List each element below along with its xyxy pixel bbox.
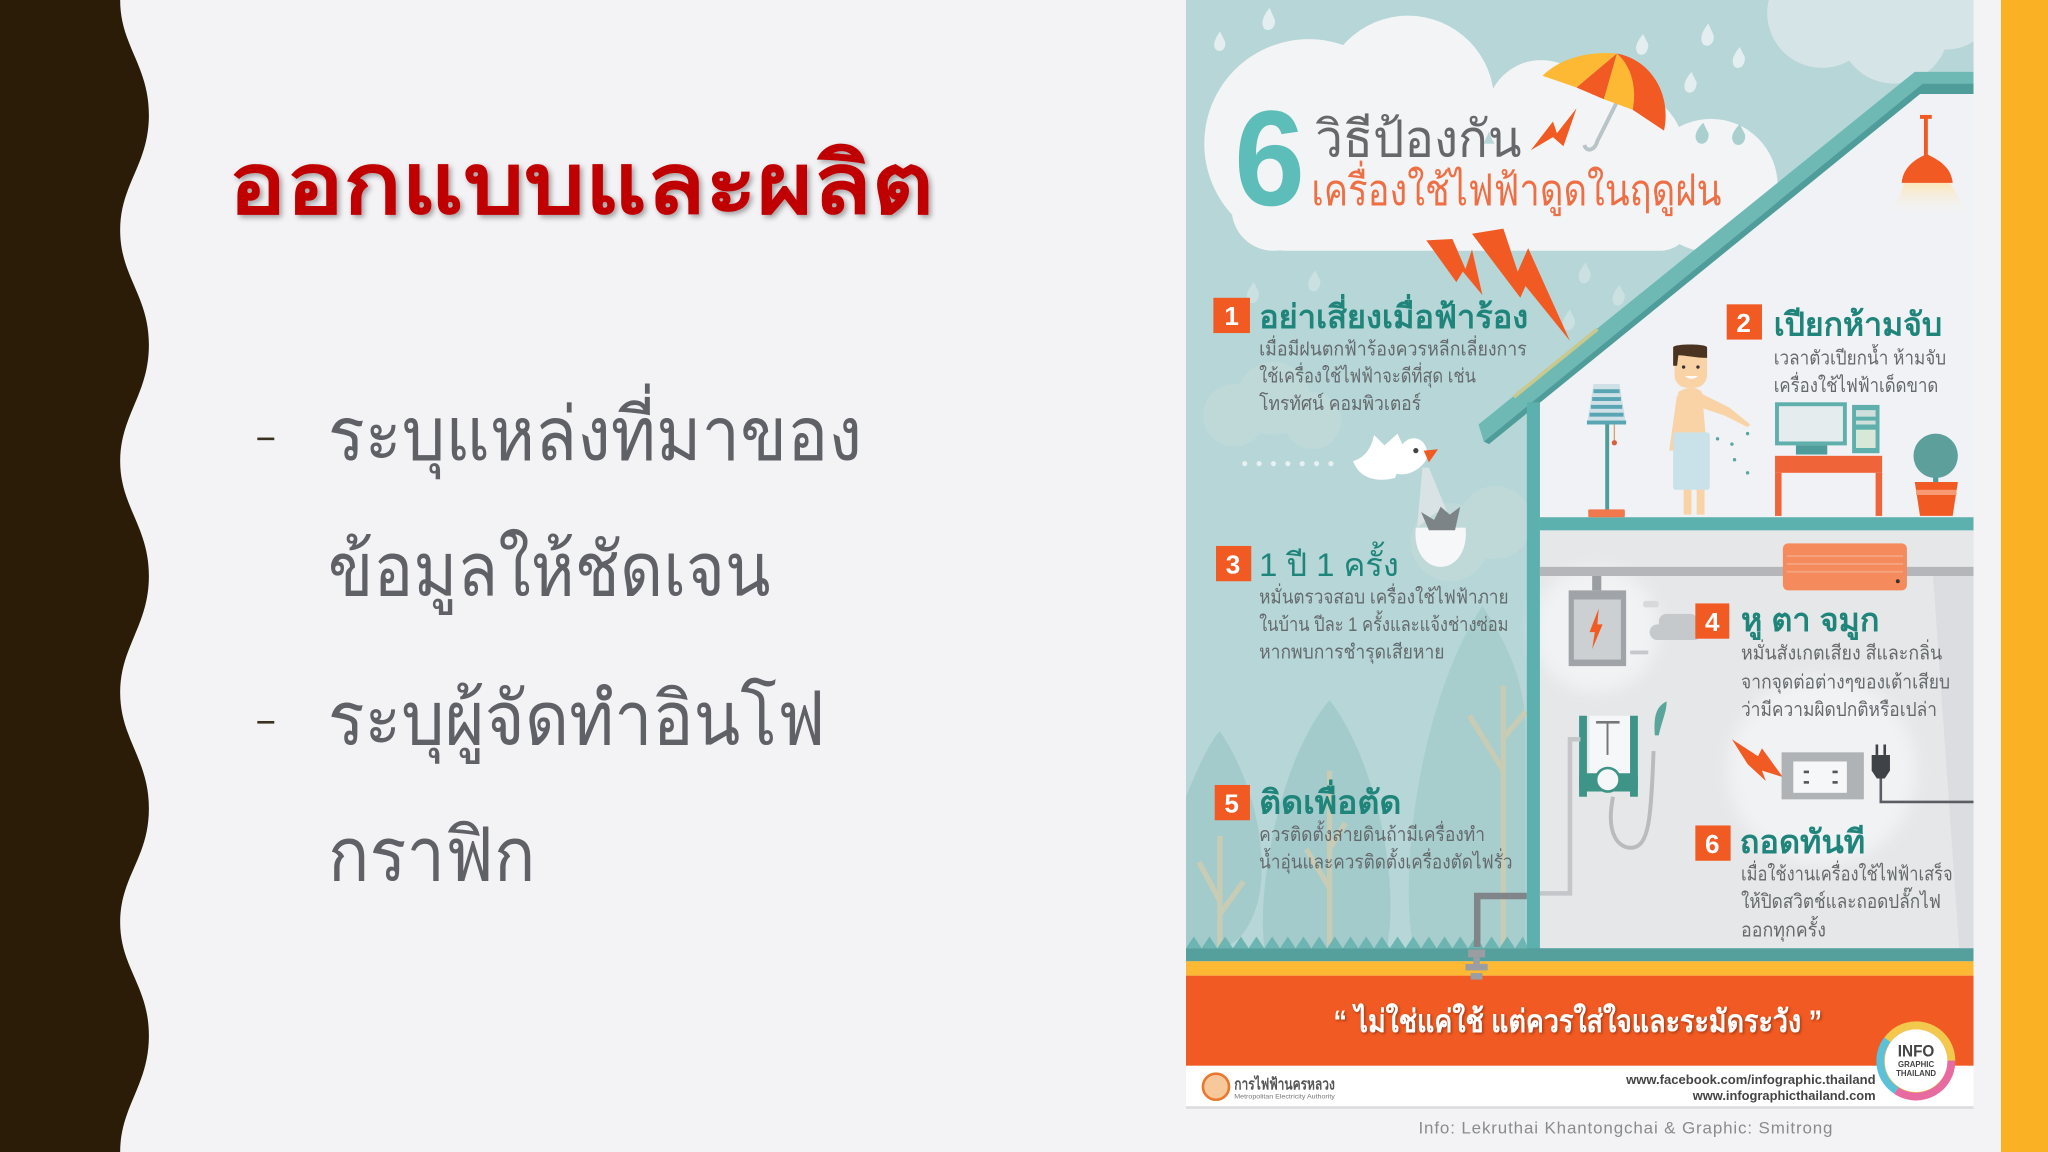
ceiling rail <box>1540 567 1974 576</box>
banner quote: “ ไม่ใช่แค่ใช้ แต่ควรใส่ใจและระมัดระวัง ” <box>1334 1003 1822 1039</box>
bundle <box>1415 528 1466 567</box>
ground rod <box>1465 950 1488 980</box>
icon: big lightning bolts <box>1426 229 1570 341</box>
icon: smoke <box>1630 601 1702 654</box>
bullet 2 line 1: ระบุผู้จัดทำอินโฟ <box>328 676 825 764</box>
title line 2: เครื่องใช้ไฟฟ้าดูดในฤดูฝน <box>1311 161 1721 217</box>
infographic poster <box>1186 0 1996 1109</box>
description: หากพบการชำรุดเสียหาย <box>1259 641 1445 664</box>
faint raindrops <box>1247 263 1625 330</box>
icon: ceiling lamp <box>1897 114 1962 204</box>
number badge <box>1727 304 1762 340</box>
icon: water heater <box>1579 701 1667 848</box>
footer logo: Metropolitan Electricity Authority <box>1203 1074 1336 1100</box>
roof <box>1479 72 1974 444</box>
step 1 <box>1213 294 1528 415</box>
tree trunks <box>1199 686 1526 947</box>
number badge <box>1695 825 1731 861</box>
Infographic Thailand badge: INFO <box>1898 1042 1934 1061</box>
house interior lower <box>1540 530 1974 948</box>
description: ใช้เครื่องใช้ไฟฟ้าจะดีที่สุด เช่น <box>1259 363 1476 389</box>
description: ออกทุกครั้ง <box>1741 915 1826 942</box>
footer web addresses <box>1625 1072 1876 1103</box>
icon: wet man <box>1669 344 1750 515</box>
icon: potted plant <box>1913 434 1958 516</box>
description: ควรติดตั้งสายดินถ้ามีเครื่องทำ <box>1259 820 1485 846</box>
footer logo: Metropolitan Electricity Authority: Metropolitan Electricity Authority <box>1234 1093 1336 1100</box>
lower room shadow <box>1933 576 1974 948</box>
bullet 2 dash <box>257 721 274 724</box>
tools in bundle <box>1421 507 1460 530</box>
yellow strip <box>1186 961 1974 976</box>
orange banner <box>1186 976 1974 1066</box>
description: โทรทัศน์ คอมพิวเตอร์ <box>1259 392 1421 415</box>
description <box>1774 343 1946 397</box>
heading: ติดเพื่อตัด <box>1259 780 1401 821</box>
title line 1: วิธีป้องกัน <box>1315 111 1522 168</box>
icon: stork carrying bundle <box>1242 434 1466 567</box>
icon: computer <box>1775 402 1880 455</box>
wing <box>1353 434 1405 480</box>
sling <box>1417 468 1448 528</box>
icon: electric meter <box>1569 576 1626 666</box>
icon: wall outlet with spark <box>1732 739 1974 802</box>
Infographic Thailand badge: THAILAND <box>1896 1069 1936 1078</box>
description <box>1741 860 1953 942</box>
step 3 <box>1216 541 1509 664</box>
house wall <box>1527 402 1540 951</box>
description: หมั่นตรวจสอบ เครื่องใช้ไฟฟ้าภาย <box>1259 583 1509 608</box>
description: จากจุดต่อต่างๆของเต้าเสียบ <box>1741 671 1950 694</box>
description: หมั่นสังเกตเสียง สีและกลิ่น <box>1741 640 1942 665</box>
description <box>1259 583 1509 664</box>
image credit: Info: Lekruthai Khantongchai & Graphic: Smitrong <box>1418 1119 1832 1138</box>
body <box>1396 438 1427 474</box>
bullet 1 line 2: ข้อมูลให้ชัดเจน <box>328 529 771 616</box>
number badge <box>1695 603 1729 639</box>
heading: เปียกห้ามจับ <box>1774 306 1942 343</box>
trees <box>1186 606 1526 947</box>
description: น้ำอุ่นและควรติดตั้งเครื่องตัดไฟรั่ว <box>1259 848 1512 875</box>
description <box>1259 820 1512 875</box>
white footer <box>1186 1066 1974 1106</box>
number badge <box>1215 785 1250 820</box>
step 2: 2 <box>1736 308 1751 338</box>
icon: umbrella <box>1543 53 1666 150</box>
step 2 <box>1727 304 1946 397</box>
faint clouds behind text <box>1203 362 1532 581</box>
heading: หู ตา จมูก <box>1741 601 1880 641</box>
title number 6: 6 <box>1234 82 1305 234</box>
icon: floor lamp <box>1587 384 1626 517</box>
number badge <box>1213 298 1250 333</box>
grass <box>1186 936 1528 948</box>
description: ในบ้าน ปีละ 1 ครั้งและแจ้งช่างซ่อม <box>1259 610 1509 636</box>
heading: ถอดทันที <box>1740 823 1865 860</box>
top right pale cloud <box>1767 0 1996 84</box>
step 6 <box>1695 823 1953 942</box>
step 5: 5 <box>1224 788 1239 818</box>
description: ว่ามีความผิดปกติหรือเปล่า <box>1741 699 1937 721</box>
step 3: 3 <box>1226 549 1240 579</box>
description <box>1259 335 1527 415</box>
step 1: 1 <box>1224 301 1239 331</box>
bullet 1 dash <box>257 438 274 440</box>
bullet list <box>257 383 862 896</box>
step 6: 6 <box>1705 829 1720 859</box>
description <box>1741 640 1950 721</box>
ground strip <box>1186 948 1974 961</box>
description: ให้ปิดสวิตช์และถอดปลั๊กไฟ <box>1741 887 1941 913</box>
bullet 1 line 1: ระบุแหล่งที่มาของ <box>328 383 862 480</box>
footer web addresses: www.infographicthailand.com <box>1692 1088 1876 1103</box>
heading: อย่าเสี่ยงเมื่อฟ้าร้อง <box>1259 294 1528 335</box>
Infographic Thailand badge <box>1880 1025 1951 1097</box>
footer logo: Metropolitan Electricity Authority: การไฟฟ้านครหลวง <box>1234 1074 1335 1093</box>
step 5 <box>1215 780 1512 875</box>
upper floor <box>1540 517 1974 530</box>
icon: air conditioner <box>1783 543 1907 590</box>
bullet 2 line 2: กราฟิก <box>328 813 536 896</box>
description: เมื่อใช้งานเครื่องใช้ไฟฟ้าเสร็จ <box>1741 860 1953 885</box>
raindrops on cloud <box>1696 123 1745 145</box>
step 4: 4 <box>1705 607 1720 637</box>
description: เวลาตัวเปียกน้ำ ห้ามจับ <box>1774 343 1946 369</box>
raindrops on sky <box>1214 8 1745 93</box>
big title cloud <box>1204 16 1778 252</box>
house interior upper <box>1540 94 1974 519</box>
yellow right bar <box>2001 0 2048 1152</box>
sky background <box>1186 0 1974 953</box>
Infographic Thailand badge: GRAPHIC <box>1898 1060 1934 1069</box>
description: เครื่องใช้ไฟฟ้าเด็ดขาด <box>1774 372 1938 397</box>
number badge <box>1216 546 1251 581</box>
dotted flight trail <box>1242 461 1334 466</box>
heading: 1 ปี 1 ครั้ง <box>1259 541 1399 583</box>
icon: desk <box>1775 456 1882 516</box>
description: เมื่อมีฝนตกฟ้าร้องควรหลีกเลี่ยงการ <box>1259 335 1527 360</box>
pipes: ground wire <box>1477 739 1580 947</box>
glow circles <box>1533 567 1916 865</box>
footer web addresses: www.facebook.com/infographic.thailand <box>1625 1072 1876 1087</box>
wavy dark left band <box>0 0 149 1152</box>
beak <box>1424 449 1438 462</box>
slide title: ออกแบบและผลิต <box>229 136 934 231</box>
step 4 <box>1695 601 1950 721</box>
icon: small lightning <box>1531 108 1576 150</box>
